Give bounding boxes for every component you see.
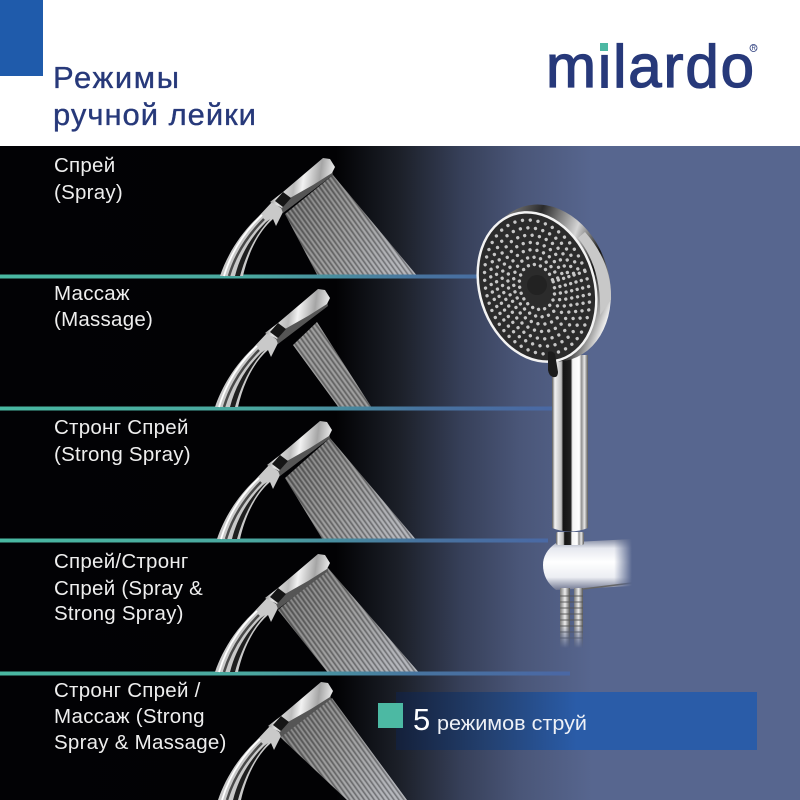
spray face [461, 198, 613, 376]
label: spray: (Spray) [54, 181, 123, 204]
title: Режимы [53, 60, 179, 95]
badge: 5 jet modes [378, 692, 757, 750]
back of head [463, 188, 631, 378]
hose [560, 588, 583, 648]
logo: milardo: R [752, 46, 756, 52]
label: spray and strong spray: Спрей (Spray & [54, 577, 203, 600]
white rim [457, 195, 617, 379]
handle tube [552, 355, 588, 532]
large chrome hand shower [476, 204, 631, 646]
title: ручной лейки [53, 97, 256, 132]
section 3: strong spray shower head [217, 421, 415, 539]
label: strong spray and massage: Стронг Спрей / [54, 679, 201, 702]
section 2: massage shower head [215, 289, 371, 407]
nozzles [468, 206, 606, 368]
collar [556, 532, 584, 545]
badge teal square [378, 703, 403, 728]
background white header [0, 0, 800, 146]
label: massage: Массаж [54, 282, 130, 305]
blue corner square [0, 0, 43, 76]
selector lever [548, 351, 558, 377]
label: strong spray and massage: Массаж (Strong [54, 705, 205, 728]
label: strong spray and massage: Spray & Massage) [54, 731, 227, 754]
badge text: режимов струй [437, 712, 587, 735]
centre button [527, 275, 547, 295]
logo: milardo: milardo [546, 33, 754, 100]
label: massage: (Massage) [54, 308, 153, 331]
bracket [543, 539, 632, 590]
divider lines [0, 274, 570, 676]
section 4: spray and strong spray shower head [215, 554, 418, 672]
label: strong spray: Стронг Спрей [54, 416, 189, 439]
section 5: strong spray and massage shower head [218, 682, 407, 800]
label: spray and strong spray: Strong Spray) [54, 602, 184, 625]
label: spray and strong spray: Спрей/Стронг [54, 550, 189, 573]
section 1: spray shower head [220, 158, 416, 276]
label: strong spray: (Strong Spray) [54, 443, 191, 466]
label: spray: Спрей [54, 154, 115, 177]
badge text: 5 [413, 702, 430, 737]
